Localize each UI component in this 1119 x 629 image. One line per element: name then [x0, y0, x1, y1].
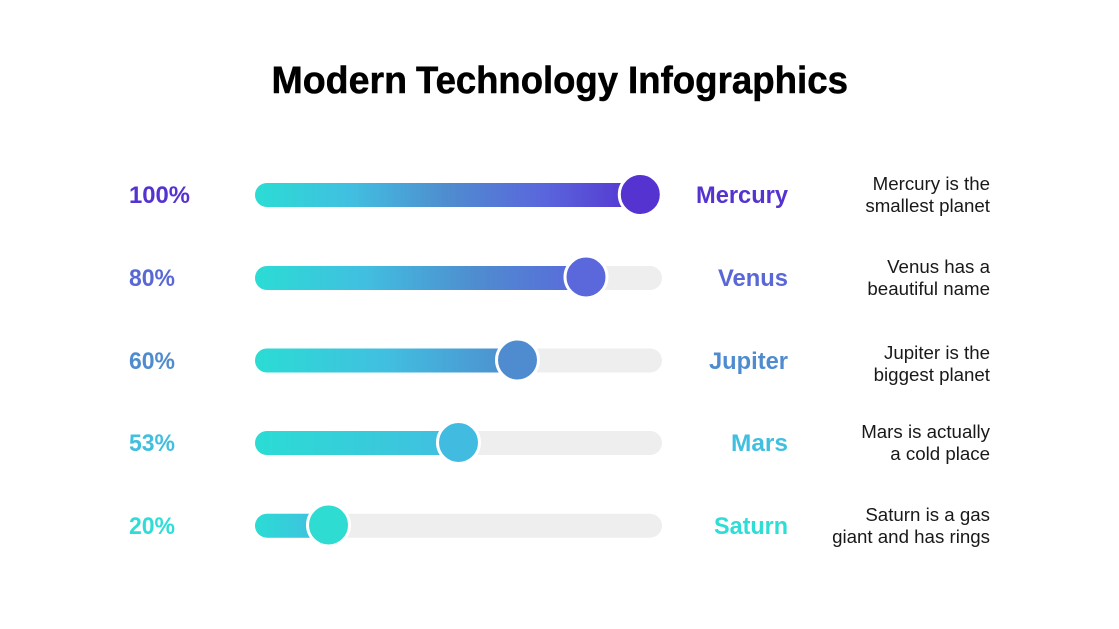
progress bar: Jupiter: [255, 339, 662, 381]
progress bar: Venus: [255, 256, 662, 298]
planet name: Venus: Venus: [718, 265, 788, 292]
planet name: Mars: Mars: [731, 430, 788, 457]
percentage: 20%: 20%: [129, 513, 175, 540]
row: Saturn: [129, 504, 990, 547]
row: Mars: [129, 421, 991, 464]
percentage: 53%: 53%: [129, 430, 175, 457]
planet name: Mercury: Mercury: [696, 182, 789, 209]
description: Saturn: giant and has rings: [832, 526, 990, 547]
percentage: 60%: 60%: [129, 348, 175, 375]
description: Jupiter: Jupiter is the: [884, 342, 990, 363]
description: Mars: Mars is actually: [861, 421, 991, 442]
title: Technology: [416, 60, 618, 102]
progress bar: Mars: [255, 422, 662, 464]
description: Mars: a cold place: [890, 443, 990, 464]
title: Infographics: [628, 60, 848, 102]
description: Venus: Venus has a: [887, 256, 991, 277]
percentage: 100%: 100%: [129, 182, 190, 209]
planet name: Jupiter: Jupiter: [709, 348, 788, 375]
title: [272, 60, 848, 102]
description: Mercury: Mercury is the: [873, 173, 990, 194]
planet name: Saturn: Saturn: [714, 513, 788, 540]
percentage: 80%: 80%: [129, 265, 175, 292]
progress bar: Mercury: [255, 174, 662, 216]
row: Jupiter: [129, 339, 991, 385]
title: Modern: [272, 60, 407, 102]
row: Mercury: [129, 173, 991, 216]
progress bar: Saturn: [255, 504, 662, 546]
description: Mercury: smallest planet: [865, 195, 991, 216]
description: Venus: beautiful name: [867, 278, 990, 299]
description: Jupiter: biggest planet: [874, 364, 991, 385]
row: Venus: [129, 256, 991, 299]
description: Saturn: Saturn is a gas: [865, 504, 990, 525]
